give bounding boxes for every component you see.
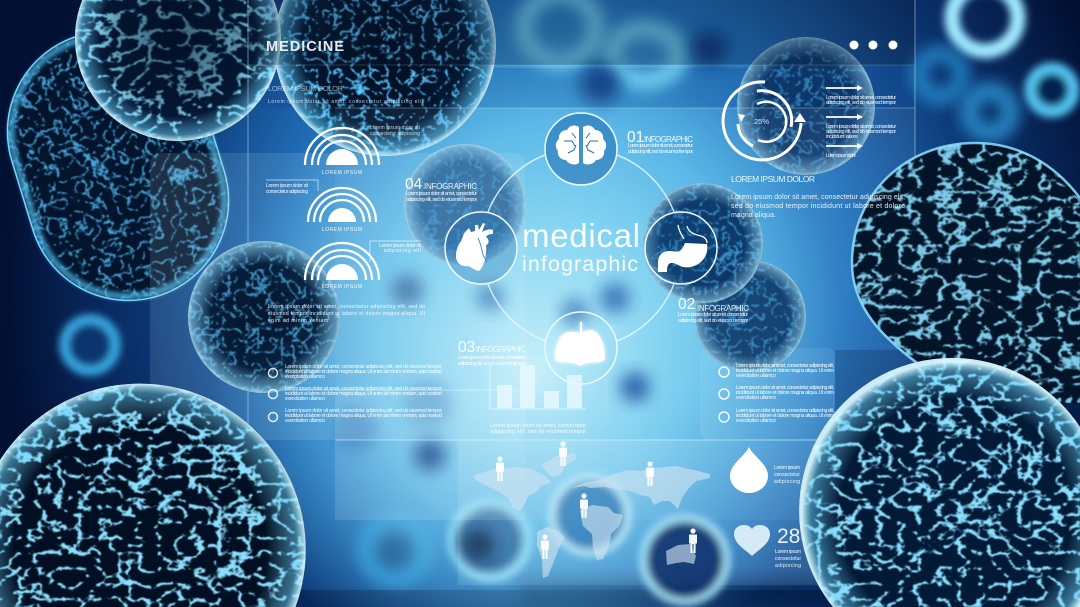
label 02: Lorem ipsum dolor sit amet, consectetur [678, 312, 748, 318]
label 01: 01 [627, 129, 644, 146]
blurred cells in the glow [333, 274, 650, 578]
icon: heart organ [445, 212, 517, 284]
right checklist: exercitation ullamco [736, 395, 776, 401]
gauge captions [266, 170, 422, 290]
right checklist: exercitation ullamco [736, 418, 776, 424]
gauge captions: Lorem ipsum dolor sit [266, 183, 309, 189]
left body text: Lorem ipsum dolor sit amet, consectetur adipiscing elit, sed do [268, 304, 425, 310]
subheading text: LOREM IPSUM DOLOR [268, 84, 344, 93]
label 03: 03 [458, 339, 475, 356]
cell: upper left capsule [0, 7, 253, 325]
right text block: Lorem ipsum dolor sit amet, consectetur adipiscing elit, [731, 194, 905, 201]
icon: water drop [730, 447, 800, 493]
icon: heart with 28% [734, 525, 819, 569]
arrow list: incididunt labore [826, 134, 858, 140]
left checklist: exercitation ullamco [285, 396, 325, 402]
world map [473, 453, 710, 578]
icon: heart with 28%: adipiscing [775, 563, 801, 569]
subheading text: Lorem ipsum dolor sit amet, consectetur adipiscing elit [268, 99, 424, 105]
right checklist: exercitation ullamco [736, 373, 776, 379]
bar chart: adipiscing elit, sed do eiusmod tempor [490, 429, 586, 435]
label 04: 04 [405, 176, 423, 193]
title: medical infographic [522, 217, 640, 276]
bar chart: Lorem ipsum dolor sit amet, consectetur [490, 423, 586, 429]
label 04: INFOGRAPHIC [424, 182, 477, 191]
icon: stomach [645, 212, 717, 284]
left checklist: Lorem ipsum dolor sit amet, consectetur adipiscing elit, sed do eiusmod tempor [285, 364, 442, 370]
left checklist [268, 364, 442, 424]
gauge captions: LOREM IPSUM [322, 170, 362, 176]
arrow list [826, 85, 896, 159]
right checklist [719, 363, 834, 424]
right checklist: incididunt ut labore et dolore magna aliqua. Ut enim [736, 413, 834, 419]
arrow list: Lorem ipsum dolor sit amet, consectetur [826, 124, 896, 130]
left checklist: Lorem ipsum dolor sit amet, consectetur adipiscing elit, sed do eiusmod tempor [285, 386, 442, 392]
arrow list: Lorem ipsum dolor [826, 153, 856, 159]
left checklist: incididunt ut labore et dolore magna aliqua. Ut enim ad minim veniam, quis nostrud [285, 369, 442, 375]
label 03: adipiscing elit, sed do eiusmod tempor [458, 361, 526, 367]
label 01 [627, 129, 693, 155]
gauge captions: Lorem ipsum dolor sit [379, 243, 422, 249]
cell: right upper capsule [852, 143, 1080, 403]
gauge captions: LOREM IPSUM [322, 284, 362, 290]
right checklist: Lorem ipsum dolor sit amet, consectetur adipiscing elit, [736, 363, 834, 369]
label 01: adipiscing elit, sed do eiusmod tempor [628, 149, 693, 155]
label 04: adipiscing elit, sed do eiusmod tempor [406, 197, 477, 203]
left body text: enim ad minim veniam [268, 318, 328, 324]
right checklist: incididunt ut labore et dolore magna aliqua. Ut enim [736, 390, 834, 396]
label 04: Lorem ipsum dolor sit amet, consectetur [406, 191, 477, 197]
donut progress chart: 25% [754, 117, 769, 126]
gauge 2 [308, 188, 376, 222]
label 02: 02 [678, 296, 695, 313]
icon: water drop: adipiscing [774, 479, 800, 485]
label 02 [678, 296, 749, 324]
label 03: INFOGRAPHIC [476, 345, 526, 354]
label 01: INFOGRAPHIC [644, 135, 693, 144]
panel heading: medicine [266, 39, 424, 137]
cell: 04 sphere [404, 144, 526, 266]
cell: top left [75, 0, 281, 141]
three dots [850, 40, 898, 50]
cell: top right [737, 37, 875, 175]
left checklist: incididunt ut labore et dolore magna aliqua. Ut enim ad minim veniam, quis nostrud [285, 391, 442, 397]
right text block [731, 174, 905, 219]
label 03: Lorem ipsum dolor sit amet, consectetur [458, 355, 526, 361]
arrow list: Lorem ipsum dolor sit amet, consectetur [826, 95, 896, 101]
right text block: sed do eiusmod tempor incididunt ut labore et dolore [731, 203, 905, 210]
map people [496, 441, 697, 559]
left checklist: exercitation ullamco [285, 374, 325, 380]
subheading text: Lorem ipsum dolor sit [370, 125, 421, 131]
right checklist: Lorem ipsum dolor sit amet, consectetur adipiscing elit, [736, 385, 834, 391]
subheading text [268, 84, 424, 137]
label 02: INFOGRAPHIC [697, 304, 749, 313]
icon: heart with 28%: 28% [777, 525, 819, 548]
right text block: LOREM IPSUM DOLOR [731, 174, 815, 184]
gauge captions: LOREM IPSUM [322, 227, 362, 233]
left checklist: Lorem ipsum dolor sit amet, consectetur adipiscing elit, sed do eiusmod tempor [285, 408, 442, 414]
gauge captions: adipiscing elit [384, 248, 422, 254]
icon: brain [545, 113, 617, 185]
bar chart [490, 364, 586, 435]
central ring diagram [445, 113, 717, 384]
arrow list: adipiscing elit, sed do eiusmod tempor [826, 100, 896, 106]
left checklist: incididunt ut labore et dolore magna aliqua. Ut enim ad minim veniam, quis nostrud [285, 413, 442, 419]
left body text: eiusmod tempor incididunt ut labore et dolore magna aliqua. Ut [268, 311, 426, 317]
gauge 1 [305, 128, 379, 165]
gauge 3 [305, 243, 379, 280]
icon: water drop: consectetur [774, 472, 800, 478]
bottom panel glowing cells [552, 477, 727, 602]
title: medical infographic: infographic [522, 252, 638, 276]
cell: right lower [799, 358, 1080, 607]
icon: water drop: Lorem ipsum [774, 465, 800, 471]
icon: lungs [545, 312, 617, 384]
arrow list: adipiscing elit, sed do eiusmod tempor [826, 129, 896, 135]
icon: heart with 28%: consectetur [775, 556, 801, 562]
cell: mid left [188, 241, 340, 393]
panel heading: medicine: MEDICINE [266, 39, 344, 55]
label 03 [458, 339, 526, 367]
left body text [268, 304, 426, 324]
icon: heart with 28%: Lorem ipsum [775, 549, 801, 555]
right checklist: incididunt ut labore et dolore magna aliqua. Ut enim [736, 368, 834, 374]
panels [150, 0, 990, 585]
gauge captions: consectetur adipiscing [266, 189, 308, 195]
cell: bottom left [0, 384, 306, 607]
subheading text: consectetur adipiscing [370, 131, 420, 137]
cell: top centre [274, 0, 496, 156]
label 04 [405, 176, 477, 203]
right checklist: Lorem ipsum dolor sit amet, consectetur adipiscing elit, [736, 408, 834, 414]
cell: 02 spheres [643, 183, 806, 372]
right text block: magna aliqua. [731, 212, 776, 219]
left checklist: exercitation ullamco [285, 418, 325, 424]
label 01: Lorem ipsum dolor sit amet, consectetur [628, 143, 693, 149]
title: medical infographic: medical [522, 217, 640, 254]
donut progress chart [723, 82, 806, 160]
label 02: adipiscing elit, sed do eiusmod tempor [678, 318, 748, 324]
three gauge rings [305, 128, 379, 280]
